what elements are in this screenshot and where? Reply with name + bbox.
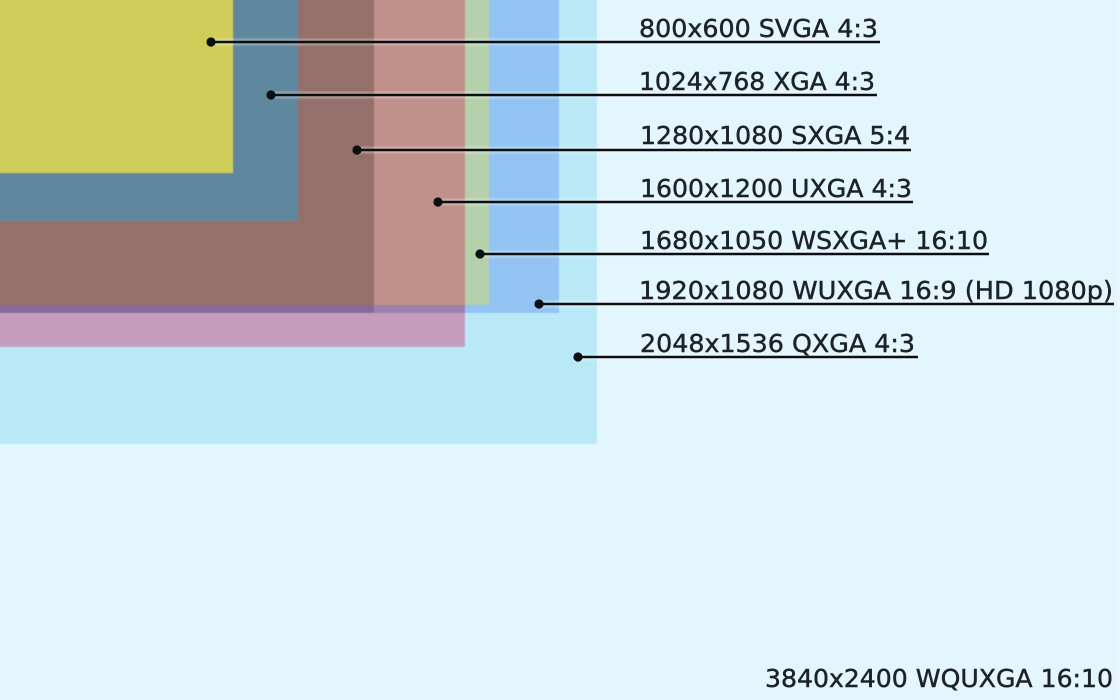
callout: 1680x1050 WSXGA+: 1680x1050 WSXGA+ 16:10 (640, 226, 988, 255)
callout: 800x600 SVGA (206, 14, 880, 47)
callout: 1280x1080 SXGA: 1280x1080 SXGA 5:4 (640, 121, 910, 150)
nested resolution rectangles (0, 0, 597, 444)
callout: 800x600 SVGA: 800x600 SVGA 4:3 (639, 14, 878, 43)
callout: 1280x1080 SXGA (352, 121, 911, 155)
callout: 1024x768 XGA: 1024x768 XGA 4:3 (639, 67, 875, 96)
rectangle: 1600x1200 UXGA lower band (0, 313, 465, 347)
callout: 1680x1050 WSXGA+ (475, 226, 989, 259)
rectangle: 1600x1200 UXGA overlap (374, 0, 465, 305)
rectangle: overlap band, WUXGA and SXGA (0, 305, 374, 313)
rectangle: 1280x1080 SXGA (0, 0, 374, 305)
callout: 1024x768 XGA (266, 67, 877, 100)
rectangle: overlap band, WUXGA and UXGA (374, 305, 465, 313)
rectangle: 2048x1536 QXGA (0, 0, 597, 444)
rectangle: 1680x1050 WSXGA+ (465, 0, 489, 305)
callout: 1600x1200 UXGA (433, 174, 913, 207)
rectangle: 800x600 SVGA (0, 0, 233, 173)
callout: 1920x1080 WUXGA: 1920x1080 WUXGA 16:9 (HD 1080p) (639, 276, 1113, 305)
rectangle: 1920x1080 WUXGA (0, 0, 559, 313)
callout: 2048x1536 QXGA: 2048x1536 QXGA 4:3 (640, 329, 915, 358)
label: 3840x2400 WQUXGA: 3840x2400 WQUXGA 16:10 (765, 664, 1113, 693)
rectangle: 1024x768 XGA (0, 0, 298, 221)
callout: 1600x1200 UXGA: 1600x1200 UXGA 4:3 (640, 174, 912, 203)
